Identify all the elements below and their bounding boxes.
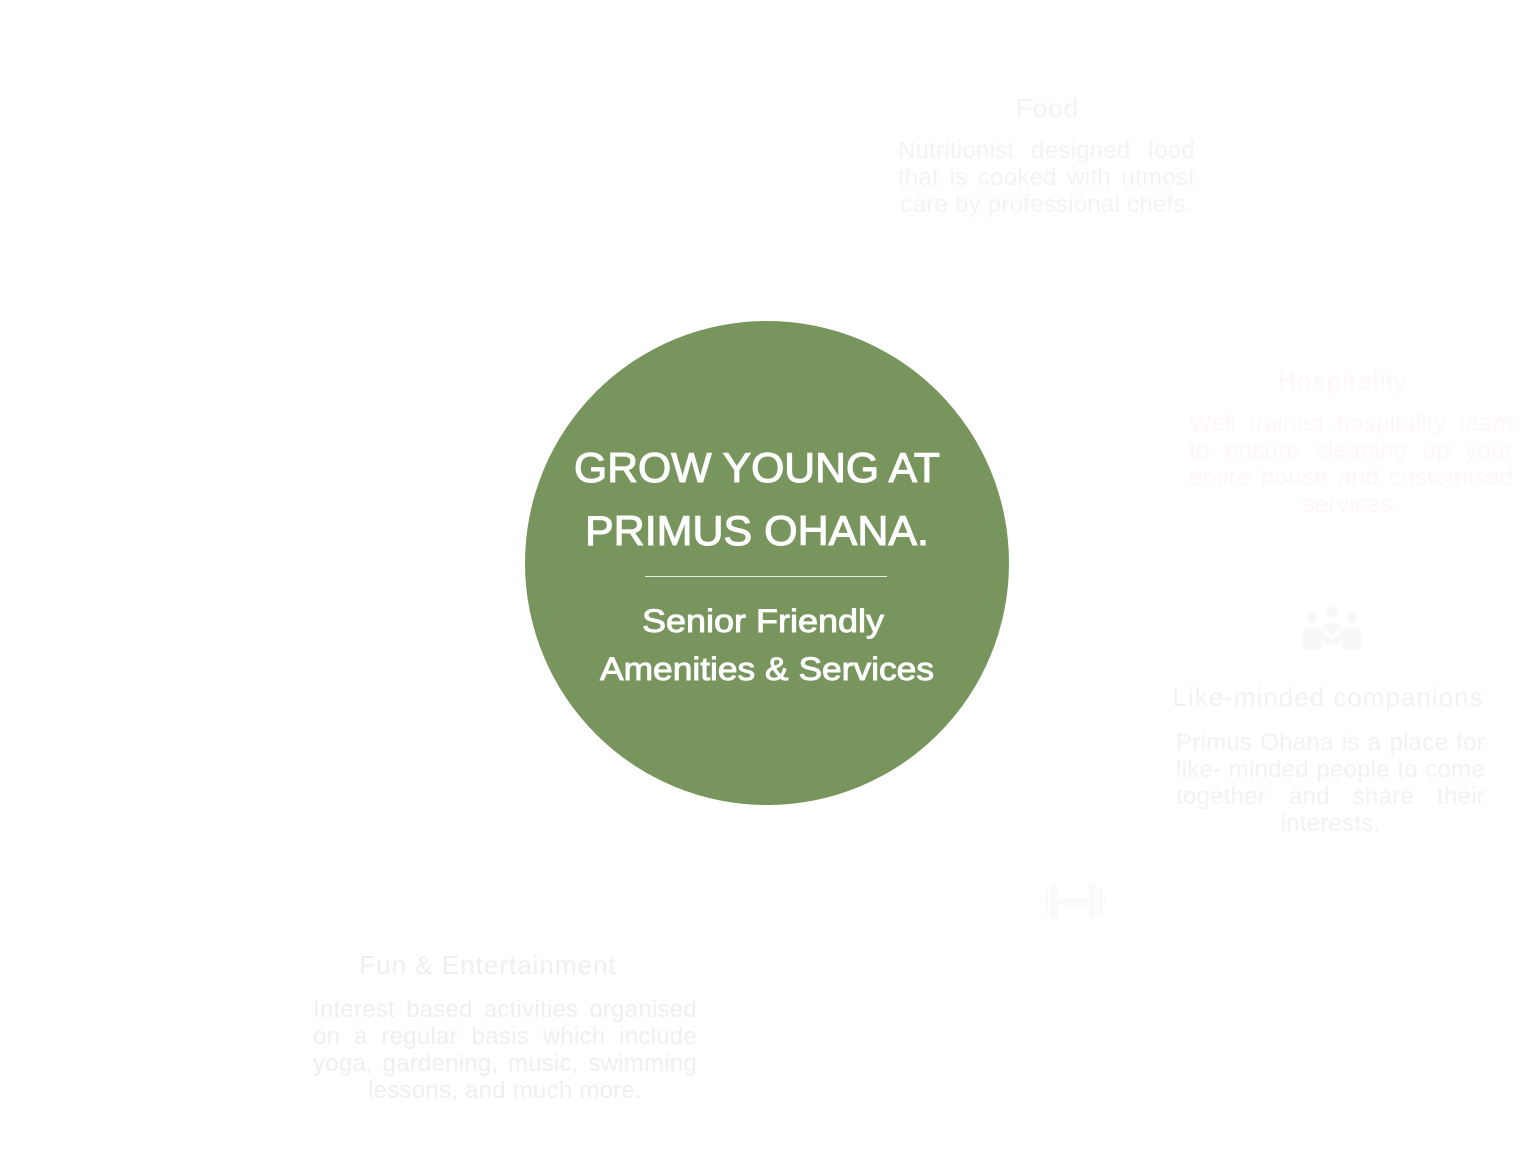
text: hospitality description: [1189, 410, 1513, 518]
heading: like-minded companions: Like-minded companions: [1172, 682, 1484, 712]
subtitle: Amenities & Services: [600, 651, 934, 687]
main title: PRIMUS OHANA.: [585, 507, 929, 554]
main title: [574, 444, 940, 554]
text: hospitality description: entire house and customised: [1189, 464, 1513, 491]
main title: GROW YOUNG AT: [574, 444, 940, 491]
text: fun description: yoga, gardening, music, swimming: [313, 1050, 697, 1077]
text: food description: [898, 137, 1195, 218]
panel: food: [898, 93, 1195, 218]
subtitle: Senior Friendly: [642, 603, 884, 639]
text: companions description: interests.: [1281, 810, 1380, 837]
icon: dumbbell: [1038, 880, 1108, 922]
text: fun description: [313, 996, 697, 1104]
text: companions description: together and share their: [1176, 783, 1485, 810]
heading: fun and entertainment: Fun & Entertainment: [359, 950, 617, 980]
text: hospitality description: services.: [1303, 491, 1399, 518]
central circle: [525, 321, 1009, 805]
heading: food: Food: [1016, 93, 1079, 123]
text: food description: that is cooked with utmost: [898, 164, 1195, 191]
text: companions description: like- minded people to come: [1176, 756, 1485, 783]
text: food description: Nutritionist designed food: [898, 137, 1195, 164]
icon: people group: [1300, 604, 1364, 654]
panel: hospitality: [1189, 366, 1513, 518]
text: food description: care by professional chefs.: [900, 191, 1193, 218]
text: companions description: [1176, 729, 1485, 837]
panel: fun and entertainment: [313, 950, 697, 1104]
subtitle: [600, 603, 934, 687]
text: hospitality description: to ensure cleaning up your: [1189, 437, 1513, 464]
text: hospitality description: Well trained hospitality team: [1189, 410, 1513, 437]
text: fun description: Interest based activities organised: [313, 996, 697, 1023]
panel: like-minded companions: [1172, 682, 1485, 837]
heading: hospitality: Hospitality: [1278, 366, 1408, 396]
text: fun description: lessons, and much more.: [368, 1077, 642, 1104]
text: companions description: Primus Ohana is a place for: [1176, 729, 1485, 756]
text: fun description: on a regular basis which include: [313, 1023, 697, 1050]
